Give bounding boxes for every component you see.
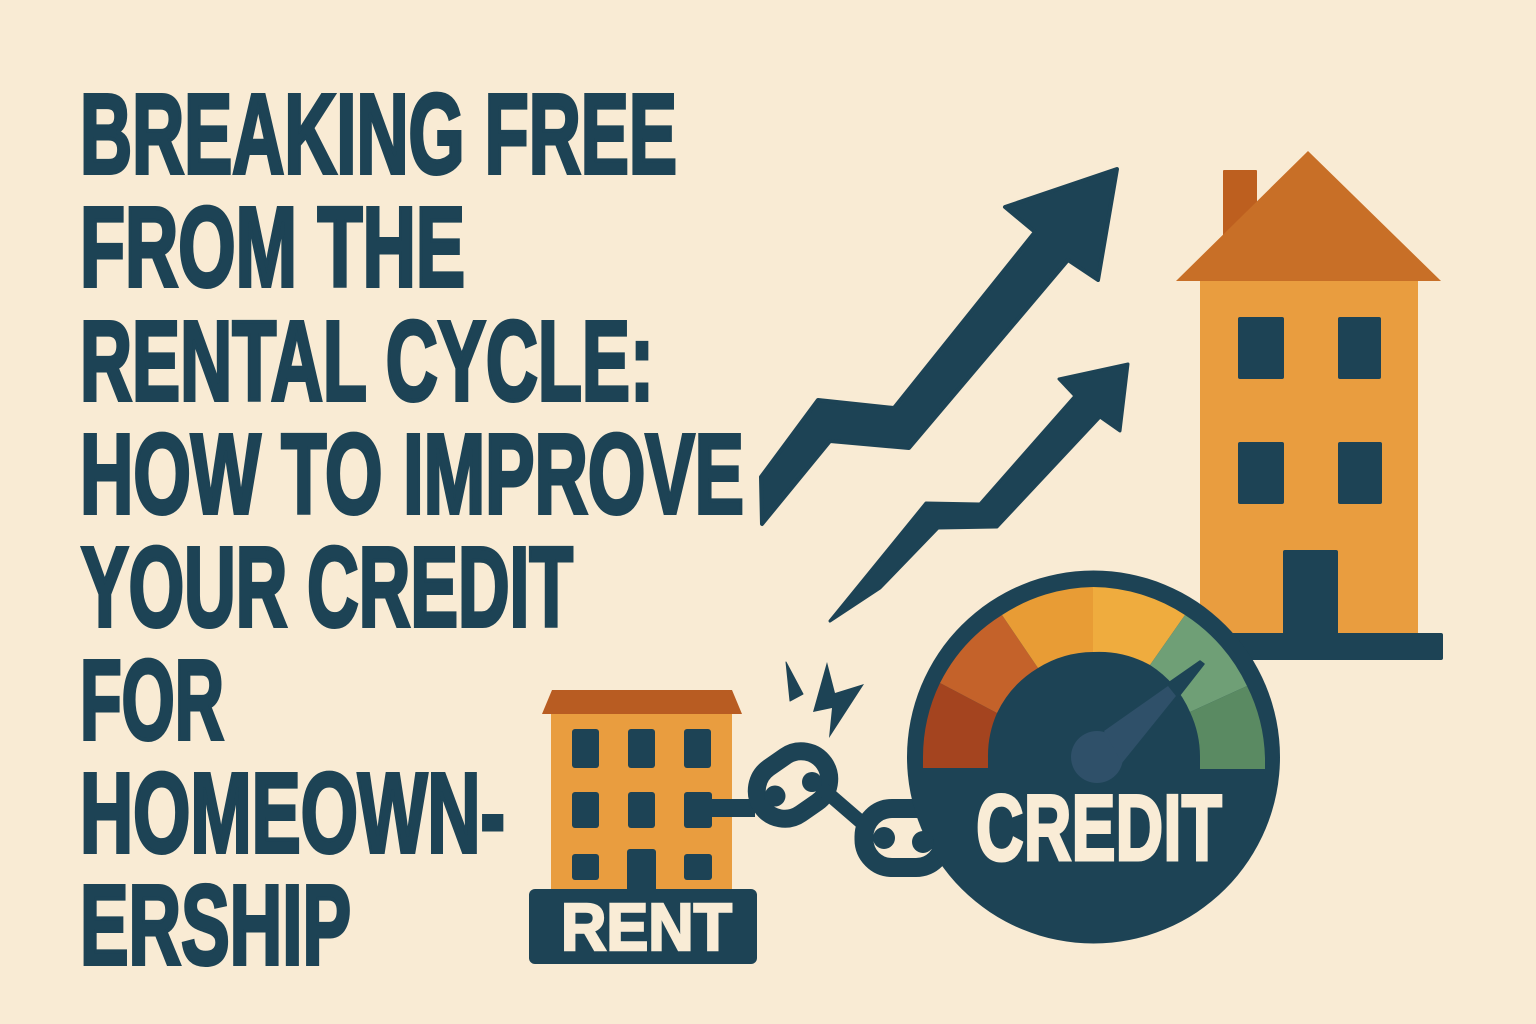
rental door [627, 849, 656, 894]
break lightning bolt [813, 662, 864, 738]
chain connector to window [705, 799, 755, 817]
gauge needle tip [1167, 661, 1204, 696]
title line 6: FOR [80, 637, 224, 763]
rental building [529, 690, 757, 965]
title [80, 71, 744, 988]
house upper right window [1338, 317, 1381, 379]
chain lower link [864, 808, 944, 868]
title line 8: ERSHIP [80, 862, 351, 988]
gauge segment: yellow [1093, 587, 1185, 665]
house body [1200, 280, 1418, 635]
broken chain [705, 740, 944, 868]
title line 4: HOW TO IMPROVE [80, 411, 744, 537]
gauge segment: light green [1150, 615, 1247, 712]
gauge dial disc [907, 570, 1280, 944]
arrow: large rising arrow [761, 169, 1117, 524]
house lower left window [1238, 442, 1284, 504]
credit gauge [907, 570, 1280, 944]
house door [1283, 550, 1338, 640]
gauge needle [1071, 686, 1176, 783]
gauge segment: green [1190, 686, 1265, 769]
title line 5: YOUR CREDIT [81, 524, 573, 650]
gauge segment: orange [940, 615, 1038, 713]
house upper left window [1238, 317, 1284, 379]
title line 2: FROM THE [80, 184, 465, 310]
rent label: RENT [561, 890, 732, 965]
chain middle connector [824, 790, 868, 828]
title line 1: BREAKING FREE [80, 71, 677, 197]
house lower right window [1338, 442, 1382, 504]
gauge segment: red [923, 683, 997, 768]
title line 7: HOMEOWN- [80, 750, 505, 876]
arrow: small rising arrow [830, 364, 1128, 621]
house ground line [1200, 633, 1443, 660]
house roof [1176, 151, 1441, 281]
chain link hook on gauge [912, 831, 934, 853]
credit label: CREDIT [976, 775, 1222, 880]
rental roof [542, 690, 742, 714]
rent sign [529, 889, 757, 964]
chain upper link [746, 740, 840, 830]
gauge segment: amber [1002, 587, 1093, 668]
house [1176, 151, 1443, 660]
chimney [1223, 170, 1257, 250]
rental body [551, 712, 732, 892]
rental windows [572, 729, 712, 880]
title line 3: RENTAL CYCLE: [80, 298, 654, 424]
break spark shard [786, 662, 803, 701]
